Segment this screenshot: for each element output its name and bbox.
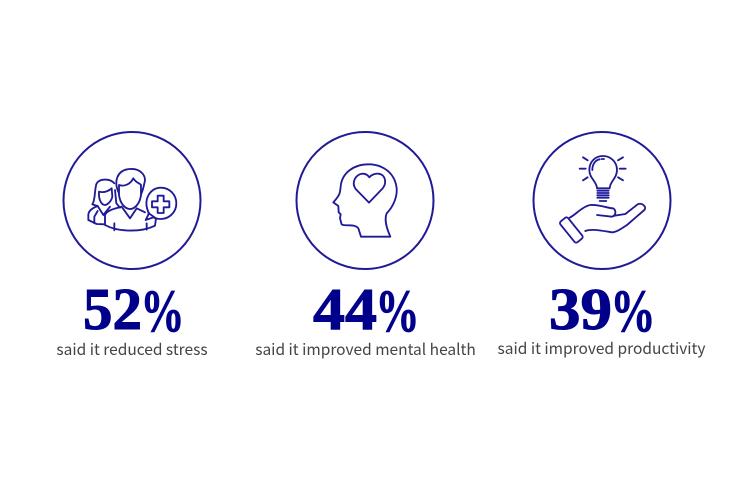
stat: 44%: 44 [313,276,377,342]
stat: 44%: % [376,278,420,344]
stat: 39%: % [610,278,656,344]
icon: head with heart [333,164,397,237]
label: improved mental health: said it improved mental health [255,338,476,360]
stat: 52%: 52 [83,276,142,342]
icon ring: hand [534,132,670,269]
panel: improved mental health [255,132,476,360]
icon ring: people [64,132,200,269]
icon: two people with medical plus [88,169,176,231]
label: improved productivity: said it improved productivity [498,337,705,359]
icon: light bulb above open hand [559,156,645,244]
stat: 39% [549,276,656,344]
label: reduced stress: said it reduced stress [56,338,208,360]
icon ring: head [296,132,434,269]
stat: 44% [313,276,420,344]
stat: 39%: 39 [549,276,612,342]
panel: improved productivity [498,132,705,359]
stat: 52%: % [140,278,184,344]
panel: reduced stress [56,132,208,360]
stat: 52% [83,276,184,344]
